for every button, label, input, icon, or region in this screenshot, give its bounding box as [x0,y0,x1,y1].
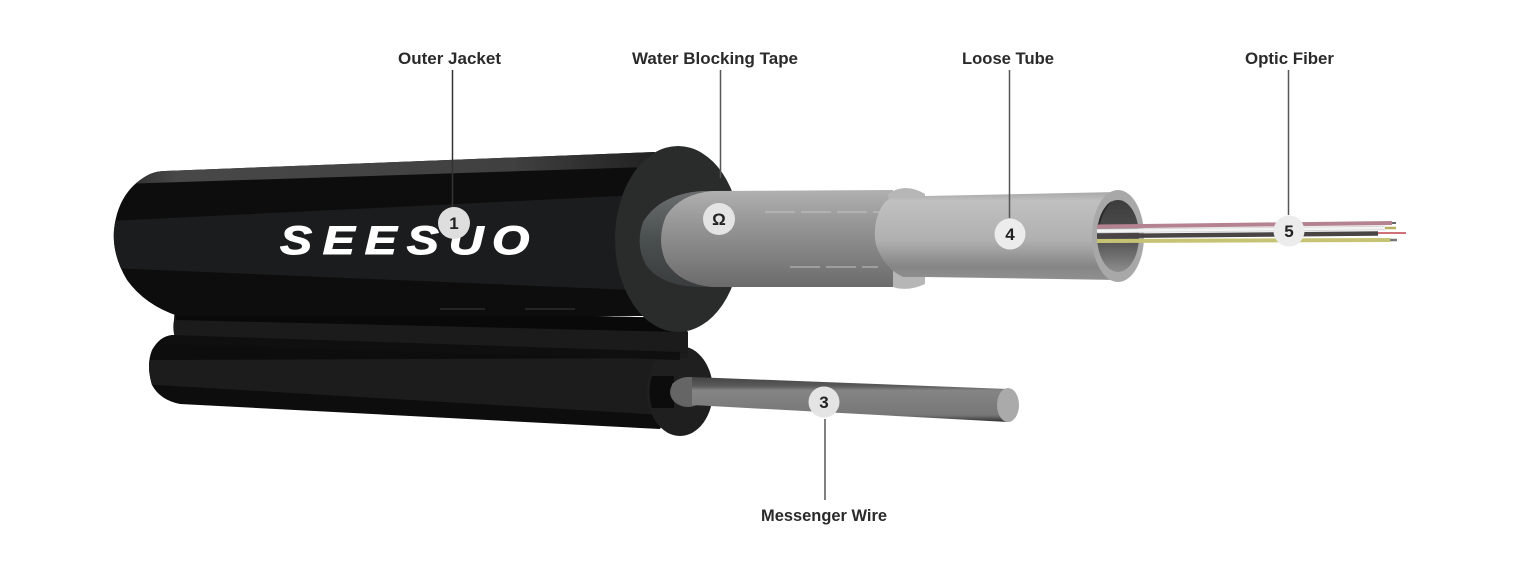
water blocking tape [640,188,925,289]
loose tube [875,190,1144,282]
optic fibers [1097,223,1406,241]
messenger wire [670,377,1019,422]
callout: outer jacket: 1 [449,214,459,233]
callout: optic fiber [1245,49,1334,246]
callout: optic fiber: 5 [1284,222,1294,241]
callout: messenger wire: 3 [819,393,829,412]
callout: outer jacket: Outer Jacket [398,49,501,68]
callout: messenger wire [761,386,887,525]
outer jacket [110,145,741,332]
brand logo: SEESUO [280,219,529,263]
messenger wire sheath [140,330,713,436]
callout: loose tube: Loose Tube [962,49,1054,68]
callout: water blocking tape: Ω [712,210,726,229]
callout: outer jacket [398,49,501,239]
callout: optic fiber: Optic Fiber [1245,49,1334,68]
callout: messenger wire: Messenger Wire [761,506,887,525]
callout: loose tube: 4 [1005,225,1015,244]
callout: water blocking tape [632,49,798,235]
callout: water blocking tape: Water Blocking Tape [632,49,798,68]
callout: loose tube [962,49,1054,250]
connecting neck [160,306,688,360]
cable structure diagram [114,52,1406,524]
